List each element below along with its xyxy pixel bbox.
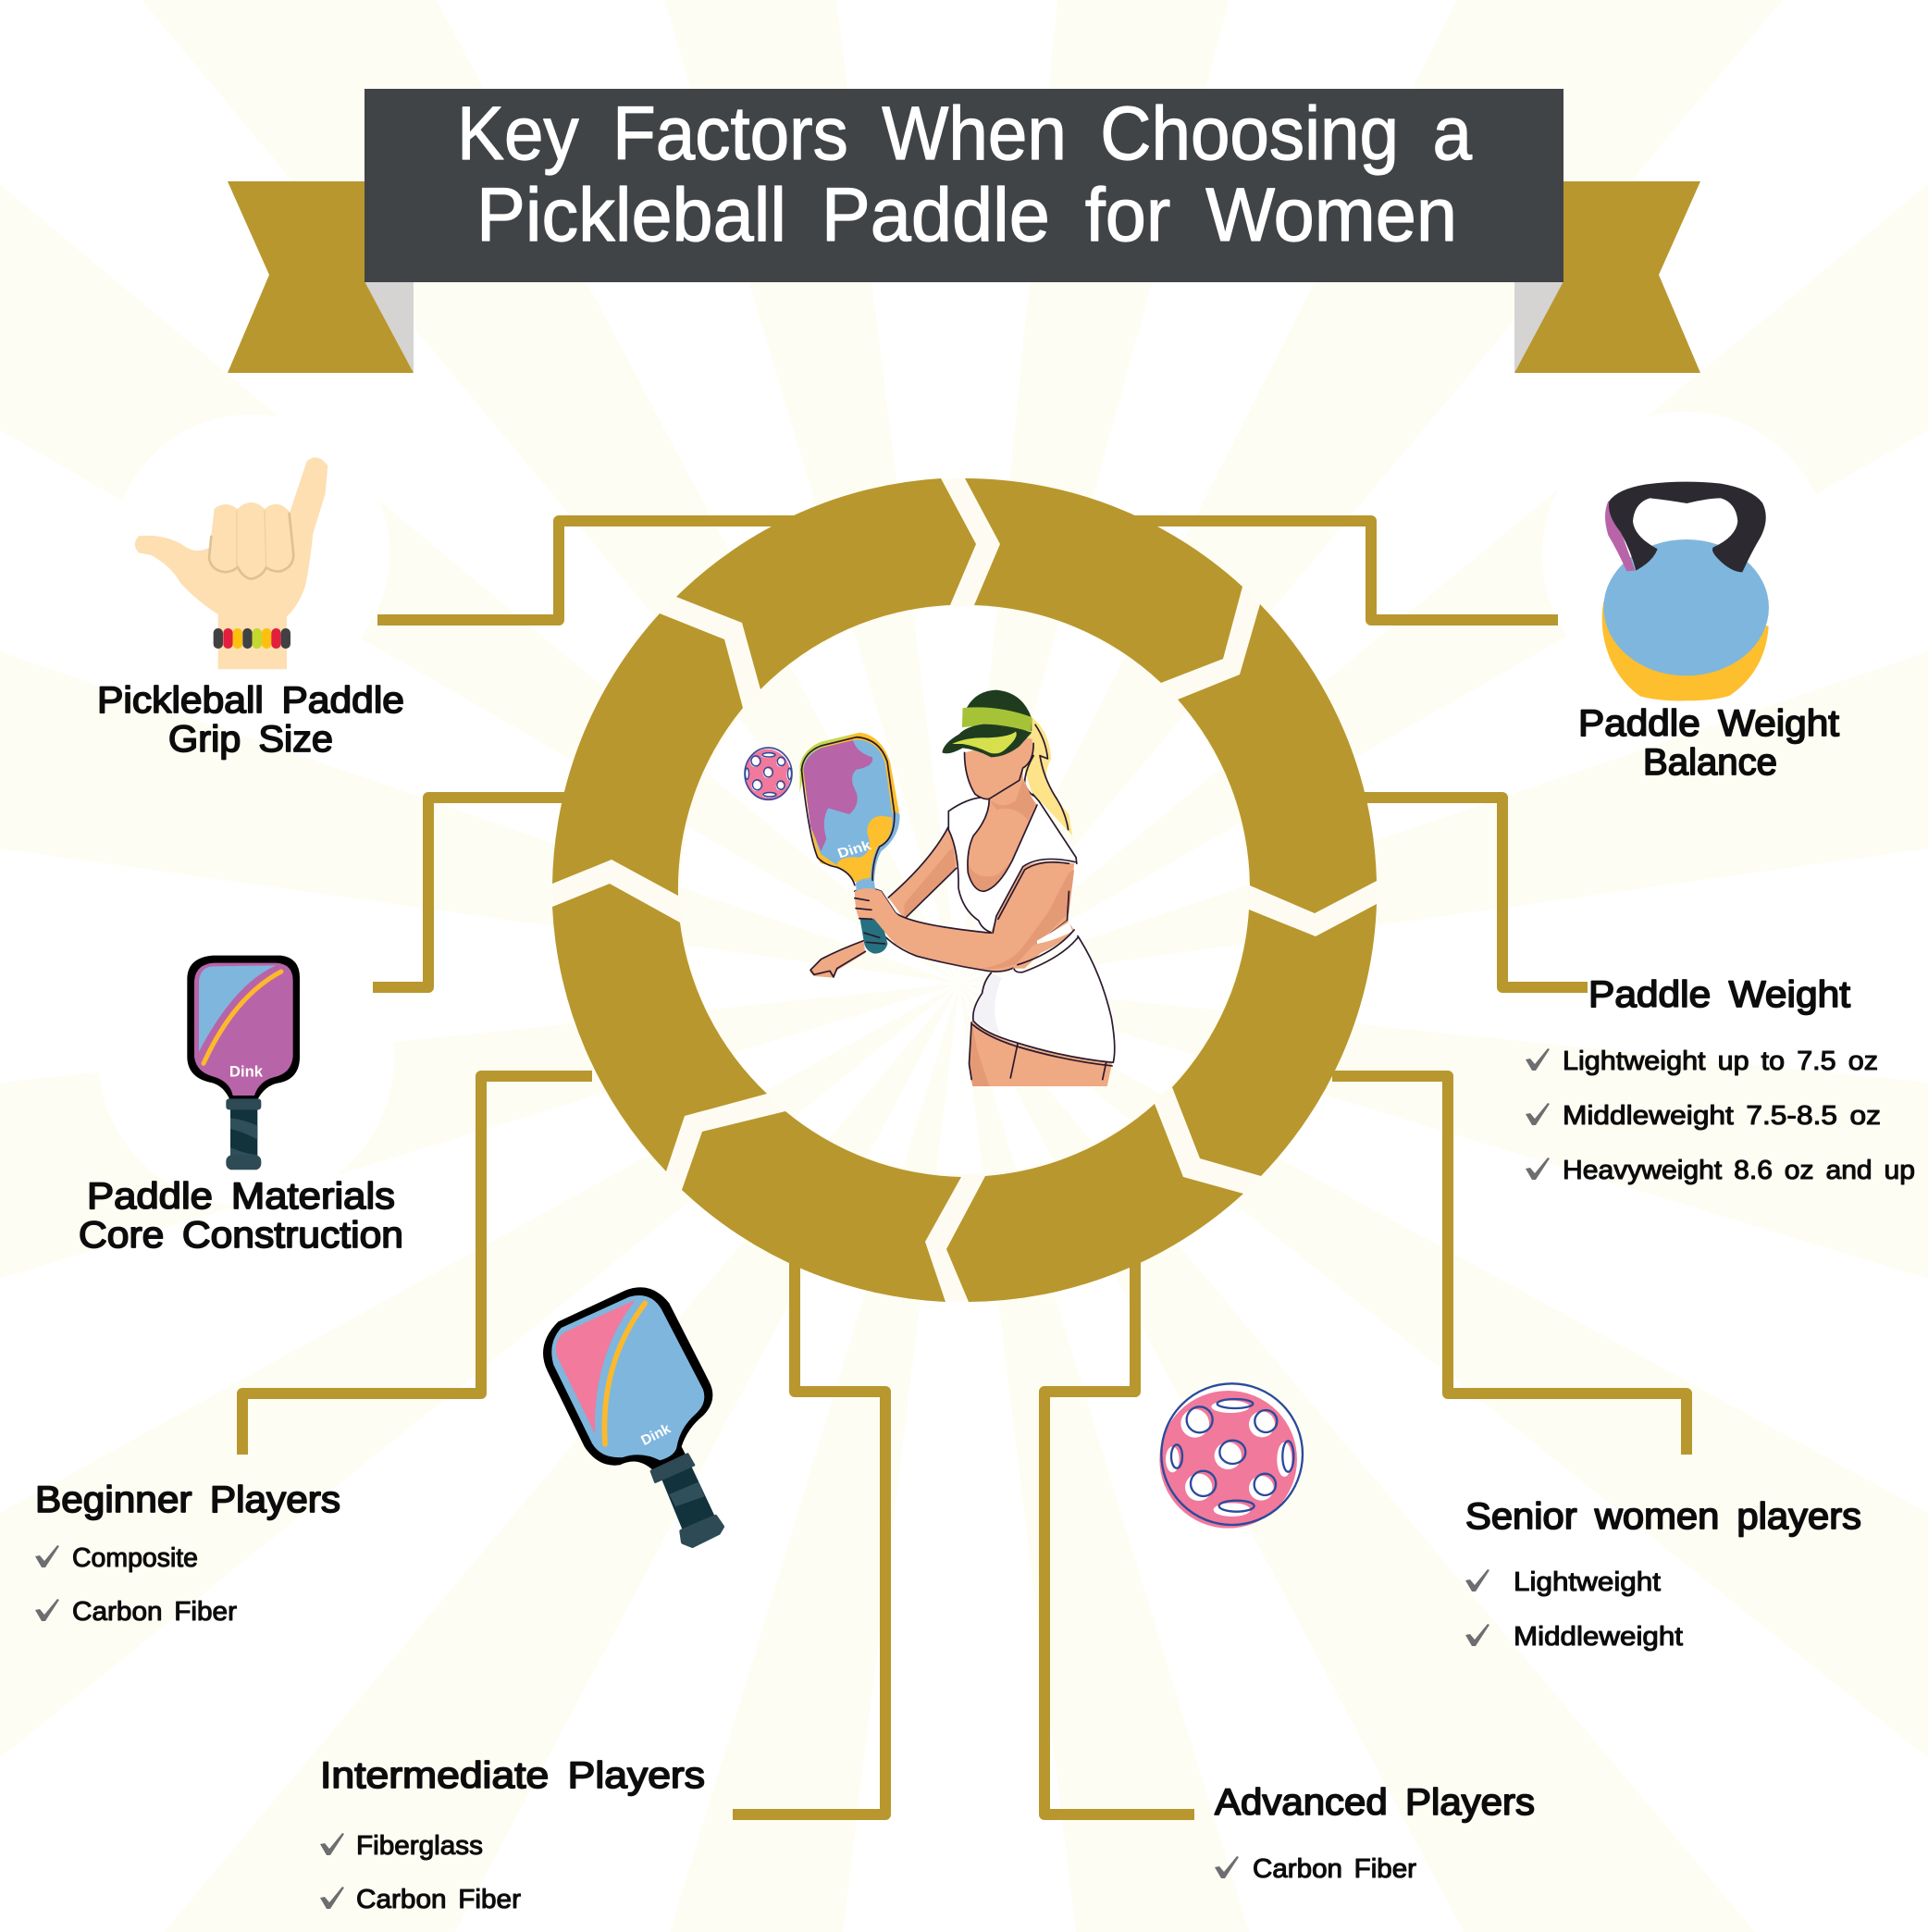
heading: intermediate: Intermediate Players: [320, 1755, 705, 1796]
panel: weight balance: [1578, 482, 1839, 783]
central illustration: woman with paddle: [800, 690, 1115, 1086]
heading: weight balance: Paddle Weight: [1578, 703, 1839, 744]
ring segment: top right: [965, 478, 1242, 683]
paddle grip: [856, 880, 876, 895]
gripping hand: [855, 888, 904, 941]
panel: intermediate players: [320, 1755, 705, 1914]
panel: paddle weight list: [1526, 974, 1915, 1185]
paddle body: [801, 733, 899, 882]
panel: materials: [79, 956, 403, 1256]
left ribbon: [228, 181, 414, 373]
list item: lightweight: [1465, 1567, 1661, 1597]
white halos behind icons: [98, 412, 1829, 1206]
list item: heavyweight: Heavyweight 8.6 oz and up: [1563, 1156, 1915, 1185]
heading: advanced: Advanced Players: [1215, 1782, 1535, 1823]
heading: beginner: Beginner Players: [35, 1480, 340, 1520]
title banner: [228, 89, 1700, 373]
ring segment: top left: [676, 478, 976, 689]
list item: composite: Composite: [72, 1543, 198, 1573]
visor crown: [965, 690, 1032, 731]
ring segment: left upper: [552, 613, 743, 896]
icon: pink pickleball: [1159, 1383, 1303, 1529]
title text: [457, 92, 1472, 257]
visor brim: [942, 724, 1032, 757]
cream band behind ring: [616, 542, 1312, 1238]
icon: shaka hand with bracelet: [135, 457, 328, 669]
ring segment: left lower: [552, 884, 767, 1171]
list item: lightweight: Lightweight up to 7.5 oz: [1563, 1046, 1878, 1076]
lower forearm and hand: [810, 941, 865, 978]
heading: grip size: [97, 680, 404, 760]
heading: grip size: Grip Size: [168, 719, 333, 760]
connector lines: [242, 521, 1687, 1814]
paddle yellow patch: [837, 816, 892, 881]
hair: [1023, 717, 1072, 836]
list item: middleweight: Middleweight: [1514, 1622, 1683, 1652]
icon: kettlebell: [1602, 482, 1769, 700]
icon: tilted blue paddle: [543, 1287, 723, 1546]
panel: advanced players: [1215, 1782, 1535, 1884]
list item: carbon fiber: Carbon Fiber: [1253, 1854, 1416, 1884]
ring segment: bottom right: [946, 1104, 1243, 1302]
heading: senior: Senior women players: [1465, 1496, 1861, 1537]
icon: tilted blue paddle: Dink: [638, 1420, 674, 1449]
shirt: [948, 796, 1076, 944]
panel: grip size: [97, 457, 404, 760]
list item: carbon fiber: Carbon Fiber: [356, 1885, 521, 1914]
circular arrow ring: [552, 478, 1377, 1302]
visor band: [962, 707, 1032, 732]
heading: materials: Core Construction: [79, 1215, 403, 1256]
heading: materials: [79, 1176, 403, 1256]
panel: beginner players: [35, 1480, 340, 1627]
icon: purple paddle: Dink: [229, 1062, 264, 1080]
right ribbon: [1514, 181, 1700, 373]
heading: materials: Paddle Materials: [87, 1176, 395, 1217]
list item: carbon fiber: Carbon Fiber: [72, 1597, 237, 1627]
title text: Key Factors When Choosing a: [457, 92, 1472, 176]
list item: fiberglass: Fiberglass: [356, 1831, 483, 1861]
ring segment: right upper: [1178, 604, 1377, 913]
ring segment: bottom left: [682, 1111, 961, 1302]
heading: weight balance: [1578, 703, 1839, 783]
heading: weight balance: Balance: [1643, 742, 1777, 783]
near arm: [855, 861, 1074, 972]
icon: purple paddle: [187, 956, 300, 1170]
heading: paddle weight: Paddle Weight: [1588, 974, 1850, 1015]
panel: senior women players: [1465, 1496, 1861, 1652]
title text: Pickleball Paddle for Women: [476, 173, 1457, 257]
list item: middleweight: Middleweight 7.5-8.5 oz: [1563, 1101, 1881, 1131]
icon: small pink ball: [744, 748, 792, 800]
title bar: [365, 89, 1563, 282]
far arm: [888, 826, 958, 919]
Dink label: Dink: [835, 838, 873, 861]
paddle purple patch: [803, 740, 872, 851]
heading: grip size: Pickleball Paddle: [97, 680, 404, 721]
waist: [1012, 921, 1074, 969]
skirt: [973, 936, 1115, 1062]
ring segment: right lower: [1172, 904, 1377, 1176]
face and neck: [965, 737, 1037, 891]
legs: [969, 1021, 1112, 1086]
list item: lightweight: Lightweight: [1514, 1567, 1661, 1597]
